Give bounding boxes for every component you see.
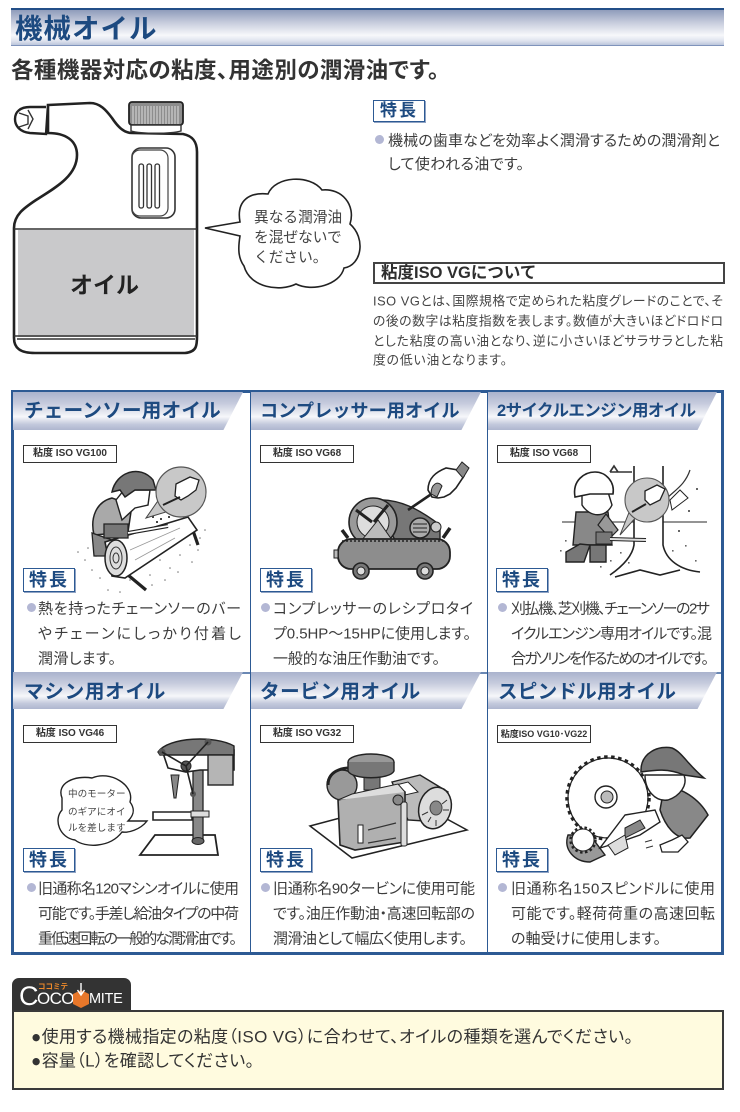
illustration: oil bottle [12, 101, 198, 354]
viscosity description: ISO VGとは、国際規格で定められた粘度グレードのことで、そ [373, 293, 723, 308]
callout: do not mix oils: 異なる潤滑油 [254, 209, 342, 226]
header: spindle oil [488, 672, 717, 709]
bullet [498, 883, 507, 892]
notes text: ●使用する機械指定の粘度（ISO VG）に合わせて、オイルの種類を選んでください。 [31, 1026, 633, 1046]
description: 潤滑油として幅広く使用します。 [273, 930, 467, 948]
illustration: worker with chainsaw [77, 466, 207, 593]
header: machine oil [13, 672, 243, 709]
panel: notes [12, 1010, 724, 1090]
viscosity description: 度の低い油となります。 [373, 353, 507, 368]
features text: して使われる油です。 [388, 156, 524, 173]
logo cube with arrow [73, 983, 89, 1008]
bullet [27, 603, 36, 612]
bullet [375, 135, 384, 144]
description: です。油圧作動油・高速回転部の [273, 906, 475, 922]
header: two-cycle engine oil: 2サイクルエンジン用オイル [497, 402, 696, 420]
panel: spindle oil [488, 672, 717, 948]
description: 旧通称名90タービンに使用可能 [273, 880, 475, 898]
bullet [261, 603, 270, 612]
description: 重低速回転の一般的な潤滑油です。 [38, 930, 237, 948]
header: two-cycle engine oil [488, 392, 717, 430]
badge: features [23, 848, 75, 872]
logo katakana: ココミテ [38, 982, 68, 991]
badge: features [260, 848, 312, 872]
illustration: oil bottle: オイル [70, 272, 139, 298]
description: 旧通称名120マシンオイルに使用 [38, 880, 239, 898]
bullet [498, 603, 507, 612]
badge: features [496, 848, 548, 872]
logo OCO: OCO [37, 989, 74, 1008]
notes text [31, 1026, 633, 1070]
viscosity tag [497, 725, 591, 743]
viscosity tag: 粘度 ISO VG68 [273, 448, 341, 459]
panel: machine oil [13, 672, 243, 948]
illustration: drill press [138, 738, 235, 856]
description: 可能です。軽荷荷重の高速回転 [511, 906, 715, 922]
description: 旧通称名150スピンドルに使用 [511, 880, 715, 898]
header: chainsaw oil [13, 392, 243, 430]
title text: 機械オイル [15, 13, 158, 44]
callout: do not mix oils [204, 178, 361, 289]
callout: oil the gears: ルを差します [68, 822, 126, 834]
panel: oil types grid [11, 390, 724, 955]
viscosity tag: 粘度 ISO VG100 [33, 448, 107, 459]
description: 熱を持ったチェーンソーのバー [38, 600, 241, 618]
heading: about viscosity [373, 262, 725, 284]
callout: oil the gears [57, 775, 148, 846]
panel: chainsaw oil [13, 392, 243, 668]
description: やチェーンにしっかり付着し [38, 626, 241, 642]
description: イクルエンジン専用オイルです。混 [511, 626, 712, 642]
description [511, 600, 712, 668]
viscosity tag [23, 445, 117, 463]
viscosity tag: 粘度ISO VG10･VG22 [501, 729, 587, 739]
description [273, 600, 473, 668]
badge: features [496, 568, 548, 592]
description [511, 880, 715, 948]
viscosity tag [260, 725, 354, 743]
badge: features: 特長 [380, 101, 418, 120]
illustration: worker cutting a tree [560, 464, 707, 578]
panel: turbine oil [251, 672, 481, 948]
callout: do not mix oils: ください。 [254, 249, 327, 266]
description: コンプレッサーのレシプロタイ [273, 600, 473, 618]
notes text: ●容量（L）を確認してください。 [31, 1052, 254, 1070]
header: turbine oil: タービン用オイル [260, 681, 421, 703]
header: compressor oil [251, 392, 481, 430]
viscosity tag [260, 445, 354, 463]
viscosity tag: 粘度 ISO VG46 [36, 728, 104, 739]
title bar [11, 8, 724, 46]
description: 合ガソリンを作るためのオイルです。 [511, 650, 709, 668]
features text [388, 132, 720, 173]
bullet [261, 883, 270, 892]
badge: features: 特長 [502, 570, 542, 590]
description: 刈払機、芝刈機、チェーンソーの2サ [511, 600, 710, 618]
logo big C: C [19, 981, 38, 1011]
panel: compressor oil [251, 392, 481, 668]
description [38, 600, 241, 668]
description: プ0.5HP～15HPに使用します。 [273, 626, 471, 642]
callout: do not mix oils: を混ぜないで [254, 229, 342, 246]
header: machine oil: マシン用オイル [24, 681, 166, 703]
description [38, 880, 239, 948]
badge: features: 特長 [502, 850, 542, 870]
viscosity tag [497, 445, 591, 463]
badge: features [23, 568, 75, 592]
features text: 機械の歯車などを効率よく潤滑するための潤滑剤と [388, 132, 720, 150]
tab: COCOMITE logo [12, 978, 131, 1011]
badge: features [373, 100, 425, 122]
column divider 1 [250, 392, 251, 953]
illustration: turbine pump [308, 753, 469, 859]
bullet [27, 883, 36, 892]
description [273, 880, 475, 948]
panel: two-cycle engine oil [488, 392, 717, 668]
viscosity description: の後の数字は粘度指数を表します。数値が大きいほどドロドロ [373, 313, 723, 328]
viscosity tag: 粘度 ISO VG32 [273, 728, 341, 739]
heading: about viscosity: 粘度ISO VGについて [381, 264, 536, 282]
header: compressor oil: コンプレッサー用オイル [260, 401, 460, 421]
illustration: air compressor [334, 461, 470, 580]
description: 一般的な油圧作動油です。 [273, 650, 440, 668]
header: turbine oil [251, 672, 481, 709]
column divider 2 [486, 392, 488, 953]
badge: features [260, 568, 312, 592]
callout: oil the gears: 中のモーター [68, 788, 126, 800]
viscosity description [373, 293, 723, 368]
viscosity tag [23, 725, 117, 743]
header: chainsaw oil: チェーンソー用オイル [24, 400, 221, 422]
subtitle: 各種機器対応の粘度、用途別の潤滑油です。 [11, 58, 439, 83]
illustration: worker oiling saw blade [565, 746, 709, 863]
description: 可能です。手差し給油タイプの中荷 [38, 906, 239, 922]
description: 潤滑します。 [38, 650, 116, 668]
badge: features: 特長 [29, 570, 69, 590]
viscosity tag: 粘度 ISO VG68 [510, 448, 578, 459]
header: spindle oil: スピンドル用オイル [498, 681, 676, 703]
callout: oil the gears: のギアにオイ [68, 807, 126, 818]
description: の軸受けに使用します。 [511, 930, 661, 948]
viscosity description: とした粘度の高い油となり、逆に小さいほどサラサラとした粘 [373, 333, 723, 348]
badge: features: 特長 [29, 850, 69, 870]
logo MITE: MITE [89, 991, 122, 1007]
badge: features: 特長 [266, 570, 306, 590]
row divider [14, 672, 721, 674]
badge: features: 特長 [266, 850, 306, 870]
